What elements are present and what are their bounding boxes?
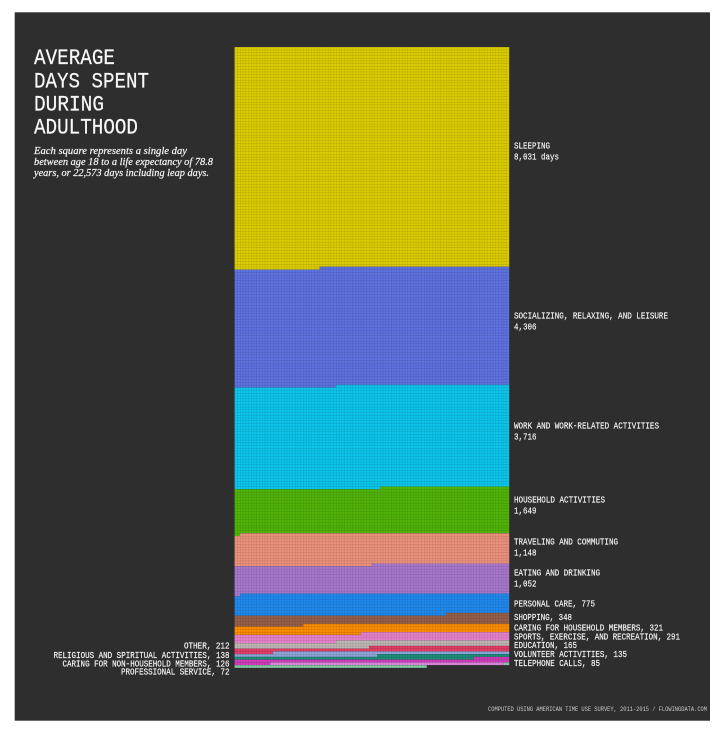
- band: personal care: [234, 594, 509, 616]
- label: household: HOUSEHOLD ACTIVITIES: [514, 495, 605, 505]
- labels: right side: [514, 141, 680, 669]
- label: work: 3,716: [514, 432, 536, 442]
- grid overlay: [234, 47, 509, 668]
- label: household: 1,649: [514, 506, 536, 516]
- band: eating and drinking: [234, 563, 509, 596]
- band: household activities: [234, 487, 509, 536]
- label: telephone: TELEPHONE CALLS, 85: [514, 659, 600, 669]
- band: professional service: [234, 662, 509, 668]
- label: socializing: 4,306: [514, 322, 536, 332]
- label: socializing: SOCIALIZING, RELAXING, AND LEISURE: [514, 311, 668, 321]
- label: religious: RELIGIOUS AND SPIRITUAL ACTIVITIES, 138: [54, 651, 230, 661]
- band: sports: [234, 632, 509, 643]
- band: caring for non-household members: [234, 657, 509, 665]
- label: personal care: PERSONAL CARE, 775: [514, 600, 595, 610]
- band: traveling and commuting: [234, 533, 509, 566]
- label: eating: [514, 568, 600, 589]
- band: socializing: [234, 267, 509, 388]
- label: sleeping: [514, 141, 559, 162]
- band: work: [234, 385, 509, 489]
- title: ADULTHOOD: [34, 114, 138, 140]
- band: sleeping: [234, 47, 509, 270]
- band: volunteer activities: [234, 654, 509, 660]
- label: socializing: [514, 311, 668, 332]
- label: sleeping: 8,031 days: [514, 152, 559, 162]
- labels: left side: [54, 641, 230, 677]
- label: caring for non-household: CARING FOR NON-HOUSEHOLD MEMBERS, 126: [62, 659, 230, 669]
- band: education: [234, 646, 509, 654]
- label: professional service: PROFESSIONAL SERVICE, 72: [121, 667, 230, 677]
- title: AVERAGE: [34, 45, 115, 71]
- label: work: WORK AND WORK-RELATED ACTIVITIES: [514, 421, 659, 431]
- label: traveling: 1,148: [514, 548, 536, 558]
- band: shopping: [234, 613, 509, 627]
- label: sleeping: SLEEPING: [514, 141, 550, 151]
- label: eating: 1,052: [514, 579, 536, 589]
- title: [34, 45, 149, 140]
- band: religious and spiritual: [234, 651, 509, 657]
- label: eating: EATING AND DRINKING: [514, 568, 600, 578]
- label: caring for household members: CARING FOR HOUSEHOLD MEMBERS, 321: [514, 623, 663, 633]
- label: household: [514, 495, 605, 516]
- title: DAYS SPENT: [34, 68, 149, 94]
- band: caring for household members: [234, 624, 509, 635]
- description text: [33, 146, 214, 179]
- title: DURING: [34, 92, 104, 118]
- label: traveling: TRAVELING AND COMMUTING: [514, 537, 618, 547]
- label: sports: SPORTS, EXERCISE, AND RECREATION, 291: [514, 632, 680, 642]
- description text: years, or 22,573 days including leap days.: [33, 168, 209, 179]
- band: telephone calls: [270, 662, 504, 665]
- label: work: [514, 421, 659, 442]
- chart: unit squares by activity: [234, 47, 509, 668]
- band: other: [234, 640, 509, 649]
- description text: Each square represents a single day: [33, 146, 187, 157]
- label: volunteer: VOLUNTEER ACTIVITIES, 135: [514, 650, 627, 660]
- label: education: EDUCATION, 165: [514, 641, 577, 651]
- label: shopping: SHOPPING, 348: [514, 613, 572, 623]
- label: other: OTHER, 212: [184, 641, 230, 651]
- description text: between age 18 to a life expectancy of 78.8: [34, 157, 214, 168]
- label: traveling: [514, 537, 618, 558]
